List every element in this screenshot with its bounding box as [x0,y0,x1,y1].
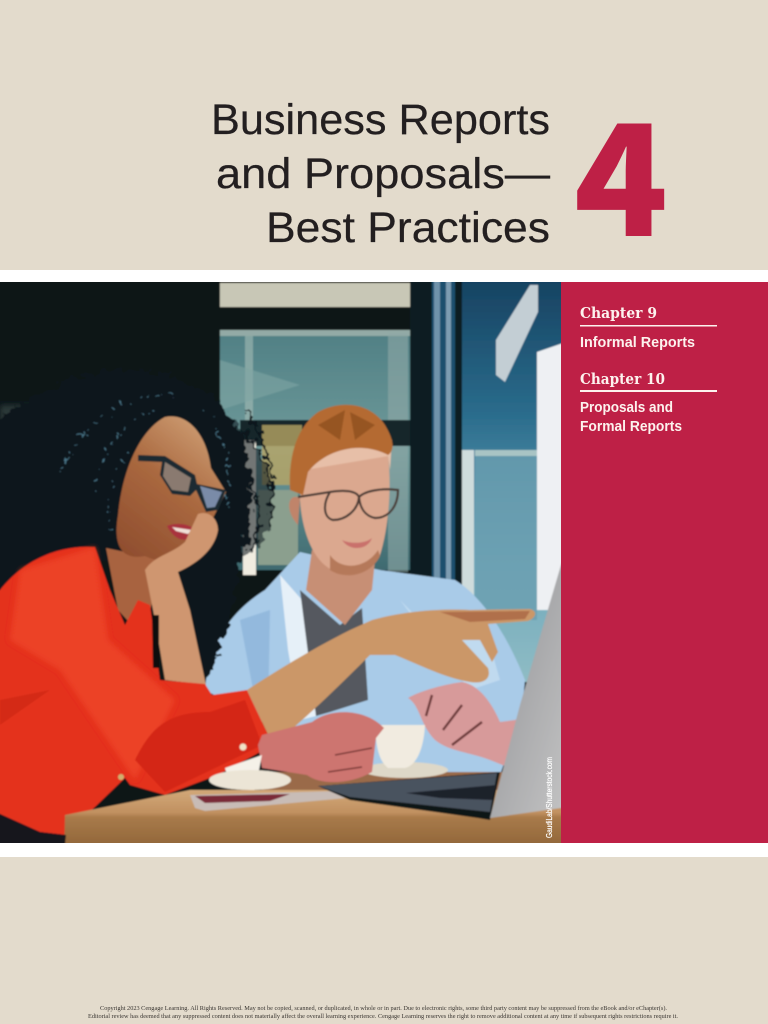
man's shirt [205,552,525,775]
woman's pointing arm and hand [247,609,535,745]
copyright notice [88,1005,678,1020]
chapter 9: Chapter 9 [580,305,657,322]
cup [375,725,425,768]
saucer [362,762,448,778]
man's glasses [298,489,398,520]
shirt shading [0,547,262,792]
laptop lid [488,564,561,819]
man's left hand and cup [258,712,448,782]
title [211,96,550,252]
chapter 10: Chapter 10 [580,371,665,388]
man's neck [306,550,375,625]
copyright notice: Editorial review has deemed that any suppressed content does not materially affect the overall learning experience. Cengage Learning reserves the right to remove additional content at any time if subsequent rights restrictions require it. [88,1013,678,1020]
woman [0,416,535,835]
photo artwork [0,270,580,860]
sidebar panel [561,282,768,843]
woman's neck [104,546,156,621]
title: Business Reports [211,96,550,144]
man's t-shirt [300,590,368,716]
chapter 9: Informal Reports [580,334,695,351]
top beige band [0,0,768,270]
smartphone [190,791,347,811]
left hand [258,712,384,782]
man's face [300,455,390,574]
woman's shirt [0,547,273,835]
chapter 10 [580,371,717,435]
laptop [318,564,561,821]
man [205,405,525,775]
man's hair [290,405,393,495]
table [0,771,561,843]
copyright notice: Copyright 2023 Cengage Learning. All Rights Reserved. May not be copied, scanned, or duplicated, in whole or in part. Due to electronic rights, some third party content may be suppressed from the eBook and/or eChapter(s). [100,1005,667,1012]
title: and Proposals— [216,150,550,198]
woman's supporting arm and hand [145,513,218,685]
chapter 10: Proposals and [580,399,673,416]
woman's lips [167,524,196,540]
woman's face [117,416,226,561]
woman's hair [0,370,274,682]
laptop base [318,772,500,820]
title: Best Practices [266,204,550,252]
part number 4: 4 [574,56,668,281]
man's right hand [408,682,525,768]
woman's glasses [138,455,226,512]
bottom beige band [0,857,768,1024]
photo credit: GaudiLab/Shutterstock.com [545,757,554,838]
plate and cup on table [209,755,291,790]
photo background [0,270,580,860]
chapter 9 [580,305,717,351]
chapter 10: Formal Reports [580,418,682,435]
photo: two colleagues at a laptop [0,270,580,860]
